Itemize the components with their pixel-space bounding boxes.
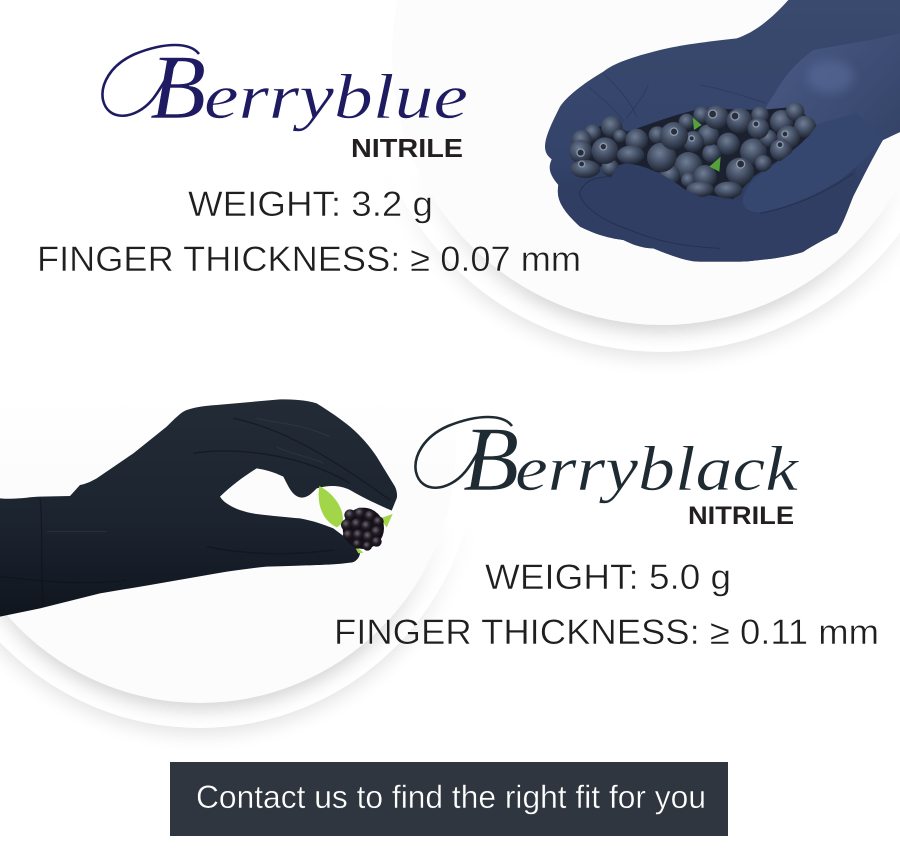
glove creases: [588, 73, 767, 122]
text: Berryblue specs: WEIGHT: 3.2 g: [188, 185, 433, 224]
panel: blueberry discs: [424, 210, 900, 362]
logo: Berryblack Nitrile: [415, 408, 800, 530]
text: Berryblue specs: [37, 185, 581, 279]
glove silhouette: [545, 0, 900, 262]
text: Berryblack specs: FINGER THICKNESS: ≥ 0.11 mm: [334, 613, 879, 652]
script wordmark: B: [150, 36, 206, 138]
contact button: [170, 762, 728, 836]
leaf: [319, 486, 393, 553]
image: black gloved hand holding blackberry: [0, 399, 397, 617]
flourish: [102, 45, 199, 116]
front fingers: [558, 163, 857, 262]
nitrile label: NITRILE: [351, 133, 463, 163]
panel: blackberry discs: [0, 561, 441, 738]
glove folds: [0, 418, 390, 607]
berry crowns: [577, 110, 788, 168]
contact button: Contact us to find the right fit for you: [196, 779, 706, 815]
flourish: [415, 417, 512, 488]
text: Berryblack specs: WEIGHT: 5.0 g: [485, 558, 731, 597]
script wordmark: erryblue: [204, 61, 468, 132]
logo: Berryblue Nitrile: [102, 36, 468, 163]
script wordmark: B: [463, 408, 519, 510]
leaves: [693, 117, 721, 172]
nitrile label: NITRILE: [688, 502, 794, 530]
text: Berryblue specs: FINGER THICKNESS: ≥ 0.07 mm: [37, 240, 581, 279]
palm highlight: [807, 60, 853, 93]
glove highlights: [47, 418, 330, 532]
blackberry: [341, 508, 384, 551]
blueberries: [569, 102, 816, 198]
text: Berryblack specs: [334, 558, 879, 652]
glove silhouette: [0, 399, 397, 617]
berry pile shadow: [582, 107, 816, 199]
finger fold lines: [579, 173, 853, 248]
image: blue gloved hands holding blueberries: [545, 0, 900, 262]
thumb: [743, 113, 883, 213]
script wordmark: erryblack: [515, 433, 800, 504]
right palm: [747, 33, 900, 203]
